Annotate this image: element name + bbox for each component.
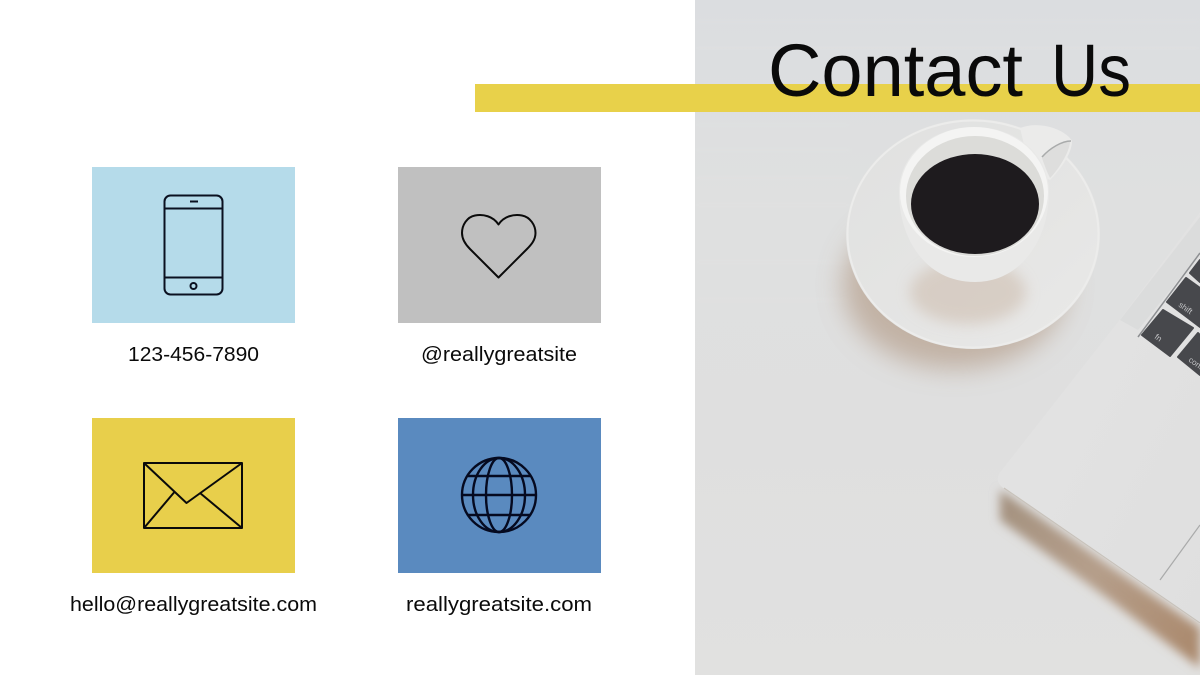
saucer rim	[846, 120, 1020, 308]
laptop speaker grille	[1120, 217, 1200, 330]
laptop keys	[1142, 260, 1200, 377]
laptop trackpad edge	[1160, 525, 1200, 580]
icon: smartphone	[164, 196, 222, 294]
icon: heart	[462, 215, 536, 278]
cup rim	[900, 127, 1048, 257]
laptop body	[1002, 485, 1200, 624]
title: Us	[1051, 29, 1131, 112]
social tile	[398, 167, 601, 323]
cup inner wall	[906, 136, 1044, 256]
contact card: email	[70, 418, 317, 616]
email tile	[92, 418, 295, 573]
social handle: @reallygreatsite	[421, 344, 577, 366]
laptop bottom edge highlight	[1004, 488, 1200, 623]
cup handle	[1022, 125, 1072, 158]
contact card: social	[398, 167, 601, 366]
phone number: 123-456-7890	[128, 344, 259, 366]
website tile	[398, 418, 601, 573]
email address: hello@reallygreatsite.com	[70, 594, 317, 616]
icon: globe	[462, 458, 536, 532]
panel: coffee and laptop photo	[695, 0, 1200, 675]
title: Contact	[768, 29, 1023, 112]
cup shadow on saucer	[910, 260, 1026, 324]
yellow title bar	[475, 84, 1200, 112]
laptop keys: shift	[1177, 300, 1195, 316]
website address: reallygreatsite.com	[406, 594, 592, 616]
laptop shadow	[1000, 490, 1200, 668]
icon: envelope	[144, 463, 242, 528]
laptop keys: fn	[1153, 332, 1163, 343]
cup body	[925, 254, 1018, 282]
saucer	[846, 196, 1092, 349]
contact card: phone	[92, 167, 295, 366]
saucer shadow	[843, 201, 1067, 369]
phone tile	[92, 167, 295, 323]
coffee	[911, 154, 1039, 254]
contact card: website	[398, 418, 601, 616]
keyboard well edge	[1138, 253, 1200, 337]
